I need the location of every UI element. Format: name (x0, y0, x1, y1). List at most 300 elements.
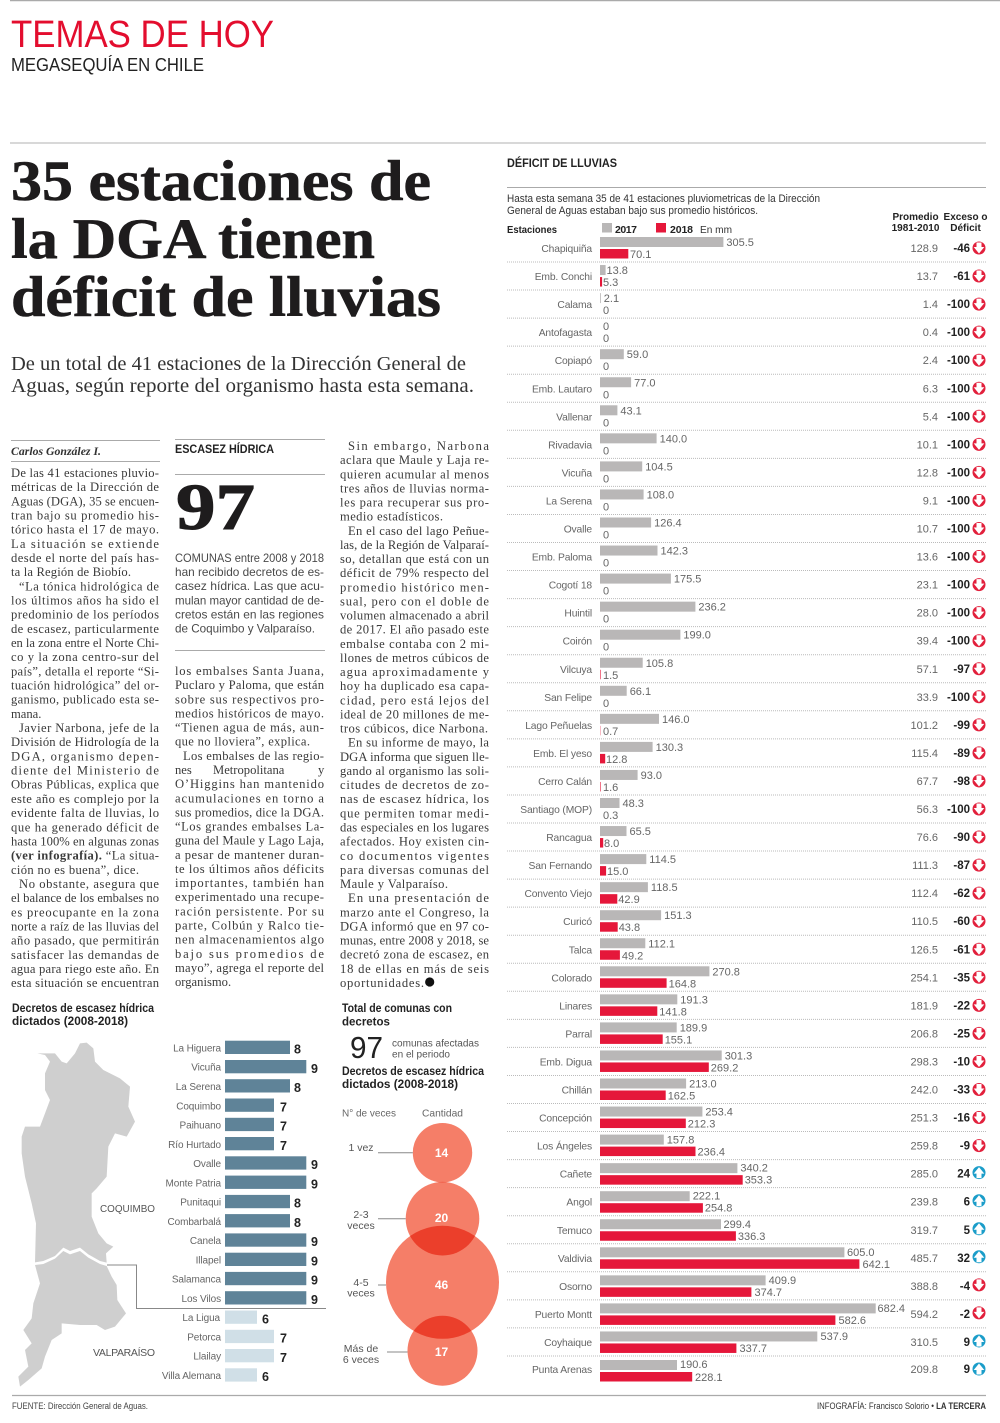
article column 3: llones de metros cúbicos de (340, 651, 489, 665)
article column 3: En el caso del lago Peñue- (348, 524, 489, 538)
article column 2: y (318, 763, 325, 777)
panel heading: DÉFICIT DE LLUVIAS (507, 155, 617, 170)
station table: 142.3 (660, 546, 688, 558)
station table: 0 (603, 698, 609, 710)
station table: Emb. El yeso (533, 749, 592, 760)
station table: 32 (957, 1253, 970, 1265)
article column 3: hoy ha duplicado esa capa- (340, 679, 489, 693)
section subtitle: MEGASEQUÍA EN CHILE (11, 55, 204, 75)
station table: 9.1 (923, 495, 938, 507)
article column 2: te los últimos años déficits (175, 862, 324, 876)
station table: 605.0 (847, 1247, 875, 1259)
station table: 285.0 (910, 1169, 938, 1181)
station table: 59.0 (627, 349, 648, 361)
station table: 66.1 (630, 686, 651, 698)
article column 1: en la zona entre el Norte Chi- (11, 636, 159, 650)
bubble chart: número de veces: 2-3 (353, 1209, 369, 1221)
bar chart: decretos por comuna: 8 (294, 1197, 301, 1211)
article column 3: medio estadísticos. (340, 510, 443, 524)
station table: -100 (947, 495, 970, 507)
headline: la DGA tienen (11, 208, 375, 271)
legend (602, 223, 732, 236)
station table: 682.4 (878, 1303, 905, 1315)
station table: -22 (953, 1000, 970, 1012)
station table: 301.3 (725, 1050, 752, 1062)
station table: 28.0 (917, 608, 938, 620)
station table: 9 (964, 1337, 970, 1349)
article column 3: embalse contaba con 2 mi- (340, 637, 489, 651)
article column 1: Javier Narbona, jefe de la (19, 721, 159, 735)
station table: 101.2 (910, 720, 938, 732)
chart heading: dictados (2008-2018) (342, 1079, 458, 1091)
number caption: comunas afectadas (392, 1039, 479, 1050)
station table: 33.9 (917, 692, 938, 704)
station table: Lago Peñuelas (525, 721, 592, 732)
article column 1: “La tónica hidrológica de (19, 579, 159, 593)
station table: 0 (603, 642, 609, 654)
article column 3 (340, 439, 490, 990)
station table: 77.0 (634, 377, 656, 389)
station table: -33 (953, 1084, 970, 1096)
station table: San Felipe (544, 693, 592, 704)
station table: 236.4 (698, 1147, 725, 1159)
station table: Rivadavia (548, 440, 592, 451)
station table: -90 (953, 832, 970, 844)
station table: 5.4 (923, 411, 938, 423)
station table: 42.9 (618, 894, 640, 906)
bar chart: decretos por comuna: Paihuano (180, 1120, 222, 1132)
sidebar text: de Coquimbo y Valparaíso. (175, 622, 315, 636)
station table: -100 (947, 524, 970, 536)
station table: 2.1 (604, 293, 619, 305)
station table: 104.5 (645, 461, 673, 473)
bar chart: decretos por comuna: Villa Alemana (162, 1371, 222, 1382)
station table: -87 (953, 860, 970, 872)
station table: 39.4 (917, 636, 938, 648)
chart heading (12, 1003, 155, 1028)
station table: 594.2 (910, 1309, 938, 1321)
article column 3: tres años de lluvias norma- (340, 481, 489, 495)
article column 3: En una presentación de (348, 891, 489, 905)
station table: Punta Arenas (532, 1365, 592, 1376)
legend: 2017 (615, 224, 637, 236)
station table: Valdivia (558, 1254, 592, 1265)
station table: -25 (953, 1028, 971, 1040)
bar chart: decretos por comuna: 9 (311, 1062, 318, 1076)
station table: -100 (947, 467, 970, 479)
station table: 12.8 (606, 754, 627, 766)
article column 3: marzo ante el Congreso, la (340, 905, 489, 919)
bar chart: decretos por comuna: 7 (280, 1351, 287, 1365)
bar chart: decretos por comuna: Punitaqui (180, 1198, 221, 1209)
station table: -62 (953, 888, 970, 900)
station table: -60 (953, 916, 970, 928)
station table: San Fernando (529, 861, 592, 872)
article column 1: este año es complejo por la (11, 792, 159, 806)
bar chart: decretos por comuna: 6 (262, 1312, 269, 1326)
article column 3: citudes de decretos de zo- (340, 778, 489, 792)
article column 3: En su informe de mayo, la (348, 736, 489, 750)
station table: 254.1 (910, 972, 938, 984)
station table: -16 (953, 1113, 970, 1125)
bar chart: decretos por comuna: 8 (294, 1081, 301, 1095)
station table: 57.1 (917, 664, 938, 676)
station table: 115.4 (911, 748, 938, 760)
article column 3: las, de la Región de Valparaí- (340, 538, 489, 552)
article column 2: importantes, también han (175, 876, 325, 890)
station table: 181.9 (910, 1000, 938, 1012)
article column 3: munas, entre 2008 y 2018, se (340, 934, 489, 948)
bar chart: decretos por comuna: Coquimbo (176, 1101, 222, 1112)
article column 3: aclara que Maule y Laja re- (340, 453, 489, 467)
bar chart: decretos por comuna: Combarbalá (168, 1217, 222, 1228)
station table: -100 (947, 355, 970, 367)
chart heading: dictados (2008-2018) (12, 1016, 128, 1028)
station table: 70.1 (630, 249, 651, 261)
column heads: N° de veces (342, 1108, 396, 1120)
bubble chart: número de veces: veces (347, 1288, 375, 1300)
article column 1: país”, detalla el reporte “Si- (11, 664, 159, 678)
bar chart: decretos por comuna: 9 (311, 1254, 318, 1268)
article column 3: volumen almacenado a abril (340, 609, 490, 623)
station table: 189.9 (680, 1022, 707, 1034)
station table: 13.8 (606, 265, 628, 277)
sidebar: escasez hídrica (175, 440, 325, 650)
column heading: exceso o déficit: Exceso o (944, 212, 987, 223)
station table: 15.0 (607, 866, 628, 878)
bar chart: decretos por comuna: Salamanca (172, 1275, 222, 1286)
station table: 0 (603, 305, 609, 317)
station table: 270.8 (712, 966, 740, 978)
station table: 206.8 (910, 1028, 938, 1040)
article column 1: DGA, organismo depen- (11, 749, 159, 763)
article column 3: nas de escasez hídrica, los (340, 792, 489, 806)
section title: TEMAS DE HOY (11, 14, 274, 56)
panel description: Hasta esta semana 35 de 41 estaciones pluviometricas de la Dirección (507, 193, 820, 205)
station table: 0 (603, 417, 609, 429)
station table: Coyhaique (544, 1338, 592, 1349)
station table: 537.9 (820, 1331, 848, 1343)
station table: 24 (957, 1169, 971, 1181)
station table: Cogotí 18 (549, 581, 592, 592)
station table: 319.7 (910, 1225, 938, 1237)
article column 1: los últimos años ha sido el (11, 594, 160, 608)
deck text: Aguas, según reporte del organismo hasta esta semana. (11, 375, 474, 397)
article column 1: agua para riego este año. En (11, 962, 160, 976)
station table: 67.7 (917, 776, 938, 788)
station table: 114.5 (649, 854, 676, 866)
column heads: Cantidad (422, 1108, 463, 1120)
station table: Puerto Montt (535, 1310, 592, 1321)
column heading: promedio: 1981-2010 (892, 223, 940, 234)
station table: Emb. Digua (540, 1057, 592, 1068)
station table: -100 (947, 411, 970, 423)
station table: Cañete (560, 1170, 592, 1181)
article column 1: División de Hidrología de la (11, 735, 159, 749)
station table: Coirón (563, 637, 592, 648)
station table: Angol (566, 1198, 592, 1209)
article column 1: evidente falta de lluvias, lo (11, 806, 159, 820)
station table: 10.7 (917, 524, 938, 536)
station table: 0.3 (603, 810, 618, 822)
station table: 112.4 (911, 888, 938, 900)
station table: -2 (960, 1309, 970, 1321)
station table: 111.3 (912, 860, 938, 872)
station table: Colorado (551, 973, 592, 984)
article column 1: diente del Ministerio de (11, 764, 159, 778)
station table: -100 (947, 636, 970, 648)
article column 3: de 2017. El año pasado este (340, 623, 489, 637)
article column 3: ideal de 20 millones de me- (340, 708, 489, 722)
station table: 76.6 (917, 832, 938, 844)
article column 3: sual, pero con el doble de (340, 594, 489, 608)
station table: -46 (953, 243, 970, 255)
article column 2: nen almacenamientos algo (175, 933, 324, 947)
station table: 162.5 (668, 1090, 695, 1102)
bar chart: decretos por comuna: 7 (280, 1139, 287, 1153)
station table: 118.5 (651, 882, 678, 894)
article column 2: organismo. (175, 975, 231, 989)
number caption (392, 1039, 479, 1061)
article column 2 (175, 664, 325, 989)
article column 3: so, detallan que está con un (340, 552, 490, 566)
headline (11, 150, 441, 329)
station table: 112.1 (648, 938, 675, 950)
bar chart: decretos por comuna: Los Vilos (182, 1294, 221, 1305)
sidebar text: mulan mayor cantidad de de- (175, 593, 324, 607)
bar chart: decretos por comuna: 7 (280, 1100, 287, 1114)
article column 1: co y la zona centro-sur del (11, 650, 160, 664)
station table: 5 (964, 1225, 971, 1237)
bar chart: decretos por comuna: 9 (311, 1235, 318, 1249)
station table: Chapiquiña (541, 244, 592, 255)
article column 2: mayo”, agrega el reporte del (175, 961, 324, 975)
station table: 6 (964, 1197, 970, 1209)
article column 3: déficit de 79% respecto del (340, 566, 490, 580)
sidebar text: han recibido decretos de es- (175, 565, 324, 579)
column heads (342, 1108, 463, 1120)
article column 3: tros cúbicos, dice Narbona. (340, 722, 488, 736)
station table: -35 (953, 972, 971, 984)
station table: 126.5 (910, 944, 938, 956)
station table: 141.8 (659, 1006, 687, 1018)
article column 1: el balance de los embalses no (11, 891, 159, 905)
article column 3: Maule y Valparaíso. (340, 877, 448, 891)
station table: 642.1 (862, 1259, 890, 1271)
station table: 65.5 (630, 826, 651, 838)
station table: 212.3 (688, 1119, 715, 1131)
station table: 0 (603, 558, 609, 570)
station table: 13.7 (917, 271, 938, 283)
big number 97: 97 (176, 471, 255, 544)
station table: 0.4 (923, 327, 938, 339)
article column 3: 18 de ellas en más de seis (340, 962, 489, 976)
bubble chart: número de veces: veces (347, 1220, 375, 1232)
station table: -100 (947, 692, 970, 704)
article column 2: que no lloviera”, explica. (175, 735, 310, 749)
article column 1: ta la Región de Biobío. (11, 565, 131, 579)
bubble chart: número de veces: 17 (435, 1345, 448, 1359)
article column 1: De las 41 estaciones pluvio- (11, 466, 159, 480)
bar chart: decretos por comuna: La Higuera (173, 1044, 222, 1054)
station table: 0 (603, 389, 609, 401)
station table: Los Ángeles (537, 1140, 592, 1153)
article column 3: les para recuperar sus pro- (340, 496, 489, 510)
station table: -100 (947, 439, 970, 451)
article column 3: para diversas comunas del (340, 863, 490, 877)
map: regiones de Coquimbo y Valparaíso (18, 1043, 135, 1387)
station table: -99 (953, 720, 970, 732)
station table: 0 (603, 473, 609, 485)
station table: -4 (960, 1281, 971, 1293)
article column 1: tran bajo su promedio his- (11, 508, 159, 522)
article column 3: oportunidades. (340, 976, 424, 990)
column heading: exceso o déficit (944, 212, 987, 234)
chart heading: Decretos de escasez hídrica (342, 1066, 485, 1078)
bubble chart: número de veces: Más de (344, 1343, 378, 1355)
station table: Huintil (564, 609, 592, 620)
station table: 10.1 (917, 439, 938, 451)
station table: Emb. Lautaro (532, 384, 592, 395)
sidebar text (175, 551, 324, 636)
article column 3: promedio histórico men- (340, 580, 489, 594)
station table: 1.6 (603, 782, 618, 794)
station table: 1.5 (603, 670, 618, 682)
station table: Chillán (562, 1086, 592, 1096)
article column 3: Sin embargo, Narbona (348, 439, 489, 453)
station table: 155.1 (665, 1034, 692, 1046)
station table: 157.8 (667, 1135, 694, 1147)
station table: 43.8 (619, 922, 640, 934)
article column 1: La situación se extiende (11, 537, 159, 551)
headline: 35 estaciones de (11, 150, 431, 213)
bar chart: decretos por comuna: 8 (294, 1042, 301, 1056)
number caption: en el periodo (392, 1050, 450, 1061)
bar chart: decretos por comuna: 7 (280, 1332, 287, 1346)
legend: En mm (700, 225, 732, 236)
panel: total de comunas con decretos (342, 1003, 499, 1386)
article column 1: Aguas (DGA), 35 se encuen- (11, 494, 159, 508)
region label: Valparaíso: VALPARAÍSO (93, 1346, 155, 1359)
station table: Emb. Paloma (532, 553, 592, 564)
section header (11, 14, 274, 75)
article column 2: parte, Colbún y Ralco tie- (175, 918, 324, 932)
column heading: estaciones: Estaciones (507, 224, 557, 236)
headline: déficit de lluvias (11, 266, 441, 329)
article column 1: hasta 100% en algunas zonas (11, 834, 159, 848)
panel heading: Total de comunas con (342, 1003, 452, 1015)
station table: 9 (964, 1364, 970, 1376)
station table: 239.8 (910, 1197, 938, 1209)
station table: 151.3 (664, 910, 692, 922)
station table: Linares (559, 1001, 592, 1012)
article column 3: gando al organismo las soli- (340, 764, 489, 778)
station table: 242.0 (910, 1084, 938, 1096)
article column 1: norte a raíz de las lluvias del (11, 919, 160, 933)
station table: Curicó (563, 917, 592, 928)
bubble chart: número de veces: 1 vez (348, 1142, 374, 1154)
article column 2: Metropolitana (213, 763, 285, 777)
station table: Temuco (557, 1226, 592, 1237)
station table: 259.8 (910, 1141, 938, 1153)
station table: 213.0 (689, 1078, 717, 1090)
article column 2: Puclaro y Paloma, que están (175, 678, 325, 692)
station table: -61 (953, 944, 971, 956)
station table: Vallenar (556, 412, 593, 423)
bar chart: decretos por comuna: Illapel (196, 1255, 221, 1266)
legend: 2018 (670, 224, 693, 236)
article column 1: Obras Públicas, explica que (11, 778, 159, 792)
article column 1: que ha generado déficit de (11, 820, 159, 834)
panel description: General de Aguas estaban bajo sus promedio históricos. (507, 205, 758, 217)
bubble chart: número de veces: 20 (435, 1211, 448, 1225)
station table: 236.2 (698, 602, 726, 614)
station table: 305.5 (726, 237, 754, 249)
station table: -97 (953, 664, 970, 676)
article column 2: experimentado una recupe- (175, 890, 324, 904)
station table: 298.3 (910, 1056, 938, 1068)
article column 2: medios históricos de mayo. (175, 706, 324, 720)
panel: decretos por comuna (12, 1003, 326, 1387)
column heading: exceso o déficit: Déficit (950, 223, 981, 234)
article column 3: co documentos vigentes (340, 849, 489, 863)
bubble chart: número de veces: 4-5 (353, 1277, 369, 1289)
source note: FUENTE: Dirección General de Aguas. (12, 1401, 148, 1411)
chart heading (342, 1066, 485, 1091)
article column 1: ganismo, publicado esta se- (11, 693, 159, 707)
panel heading: decretos (342, 1017, 390, 1029)
station table: -100 (947, 804, 970, 816)
article column 1: esta situación se encuentran (11, 976, 160, 990)
column heading: promedio: Promedio (892, 212, 939, 223)
chart heading: Decretos de escasez hídrica (12, 1003, 155, 1015)
station table: 310.5 (910, 1337, 938, 1349)
station table: -100 (947, 299, 970, 311)
station table: Santiago (MOP) (520, 805, 592, 816)
station table: -98 (953, 776, 971, 788)
station table: 190.6 (680, 1359, 708, 1371)
deck text: De un total de 41 estaciones de la Dirección General de (11, 353, 466, 375)
article column 1: predominio de los períodos (11, 608, 159, 622)
station table: 175.5 (674, 574, 701, 586)
station table: La Serena (546, 496, 592, 507)
station table: 340.2 (740, 1163, 768, 1175)
byline: Carlos González I. (11, 446, 101, 458)
article column 2: nes (175, 763, 192, 777)
station table: 0 (603, 321, 609, 333)
number 97: 97 (350, 1030, 383, 1065)
bar chart: decretos por comuna: 9 (311, 1177, 318, 1191)
bar chart: decretos por comuna: Vicuña (191, 1063, 222, 1074)
article column 1: es preocupante en la zona (11, 905, 159, 919)
article column 1 (11, 466, 160, 990)
sidebar text: COMUNAS entre 2008 y 2018 (175, 551, 324, 565)
station table: 0 (603, 445, 609, 457)
bar chart: decretos por comuna: 6 (262, 1370, 269, 1384)
bubble chart: número de veces: 46 (435, 1278, 448, 1292)
sidebar text: casez hídrica. Las que acu- (175, 579, 324, 593)
station table: -61 (953, 271, 971, 283)
article column 1: ción no es buena”, dice. (11, 863, 139, 877)
bubble chart: número de veces: 14 (435, 1146, 448, 1160)
station table: 582.6 (838, 1315, 866, 1327)
sidebar text: cretos están en las regiones (175, 607, 324, 621)
bar chart: decretos por comuna: Monte Patria (166, 1178, 222, 1189)
station table: 164.8 (669, 978, 696, 990)
station table: 13.6 (917, 552, 938, 564)
station table: 0 (603, 501, 609, 513)
bar chart: decretos por comuna: 8 (294, 1216, 301, 1230)
